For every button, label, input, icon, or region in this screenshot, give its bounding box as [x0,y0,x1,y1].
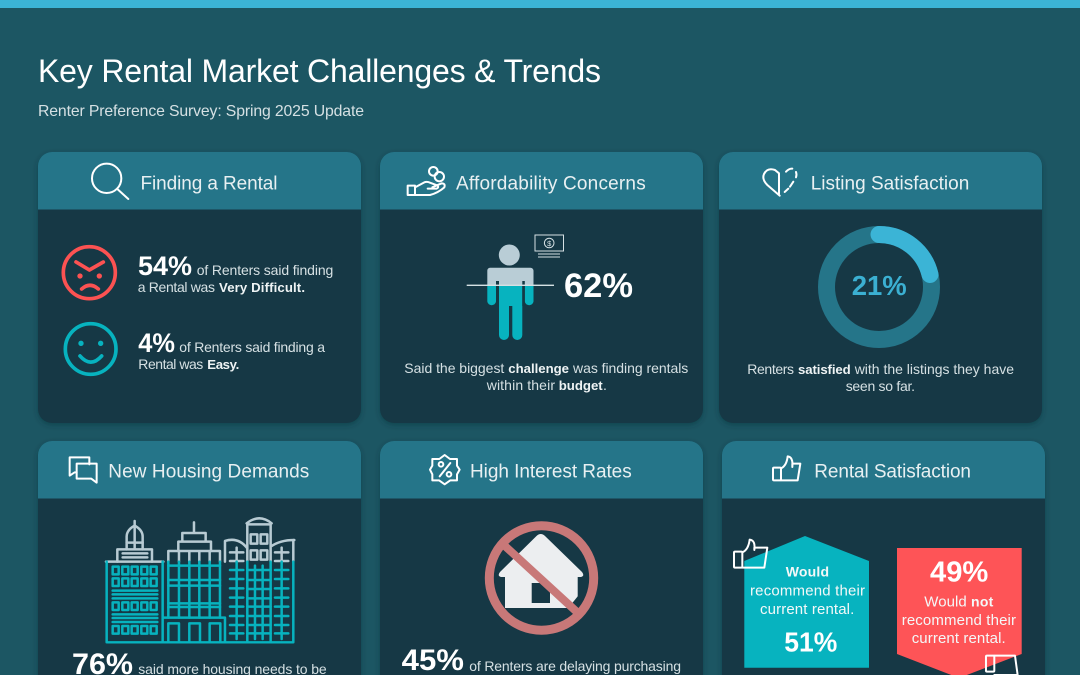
stat: 76 percent [72,648,327,675]
card: would recommend: recommend their [750,583,865,600]
panel: affordability concerns [380,152,703,423]
text: renters satisfied: Renters [747,361,794,377]
heading: rental satisfaction: Rental Satisfaction [814,462,971,483]
stat: 54 percent very difficult: of Renters said finding [197,262,333,278]
heading: new housing demands: New Housing Demands [108,462,309,483]
icon: money [535,235,564,257]
stat: 4 percent easy: Easy. [207,357,239,372]
icon: person 62 percent filled [467,244,554,340]
heading: listing satisfaction: Listing Satisfaction [811,173,969,194]
heading: finding a rental: Finding a Rental [140,173,278,194]
illustration: city buildings [106,518,294,642]
text: budget challenge: . [603,377,607,393]
panel: rental satisfaction [722,441,1045,675]
title: Key Rental Market Challenges & Trends [38,53,601,89]
card: would recommend: Would [786,564,829,580]
stat: 45 percent: of Renters are delaying purchasing [469,658,681,674]
heading: affordability concerns: Affordability Concerns [456,173,646,194]
icon: angry face [63,247,115,299]
card: would recommend: 51% [784,627,837,658]
icon: money: $ [547,239,552,248]
text: renters satisfied: seen so far. [846,378,915,394]
card: would recommend [734,536,869,668]
text: budget challenge: was finding rentals [572,360,688,376]
icon: thumbs up [773,456,800,480]
card: would not recommend: recommend their [902,612,1016,629]
card: would not recommend: current rental. [912,630,1006,647]
text: budget challenge: within their [486,377,555,393]
icon: percent badge [430,455,460,484]
panel: high interest rates [380,441,703,675]
stat: 4 percent easy: 4% [138,328,175,358]
text: budget challenge: challenge [508,361,569,376]
icon: thumbs down small [986,656,1018,675]
stat: 4 percent easy: of Renters said finding a [179,339,325,355]
icon: hand with coins [408,167,445,195]
panel: listing satisfaction [719,152,1042,423]
stat: 54 percent very difficult [138,251,333,295]
donut chart: 21 percent [826,234,932,340]
icon: heart [763,169,796,196]
icon: happy face [65,324,116,374]
icon: no house sign [489,526,594,630]
icon: thumbs up small [734,540,767,568]
stat: 4 percent easy: Rental was [138,356,203,372]
donut chart: 21 percent: 21% [852,270,907,301]
card: would recommend: current rental. [760,601,854,618]
text: budget challenge [404,360,688,393]
panel: new housing demands [38,441,361,675]
stat: 54 percent very difficult: Very Difficult. [219,280,305,295]
stat: 54 percent very difficult: a Rental was [138,279,215,295]
icon: magnifier [92,164,128,199]
text: budget challenge: budget [559,378,603,393]
card: would not recommend: 49% [930,557,989,589]
text: renters satisfied [747,361,1014,394]
text: renters satisfied: satisfied [798,362,851,377]
text: budget challenge: Said the biggest [404,360,504,376]
card: would not recommend: not [971,594,994,610]
text: renters satisfied: with the listings they have [854,361,1014,377]
top accent bar [0,0,1080,8]
panel: finding a rental [38,152,361,423]
card: would not recommend [897,548,1022,675]
stat: 62 percent: 62% [564,267,633,305]
icon: chat bubbles [70,457,97,483]
card: would not recommend: Would [924,594,967,611]
subtitle: Renter Preference Survey: Spring 2025 Update [38,103,364,120]
stat: 45 percent [402,644,681,675]
heading: high interest rates: High Interest Rates [470,462,632,483]
stat: 4 percent easy [138,328,325,372]
stat: 54 percent very difficult: 54% [138,251,192,281]
